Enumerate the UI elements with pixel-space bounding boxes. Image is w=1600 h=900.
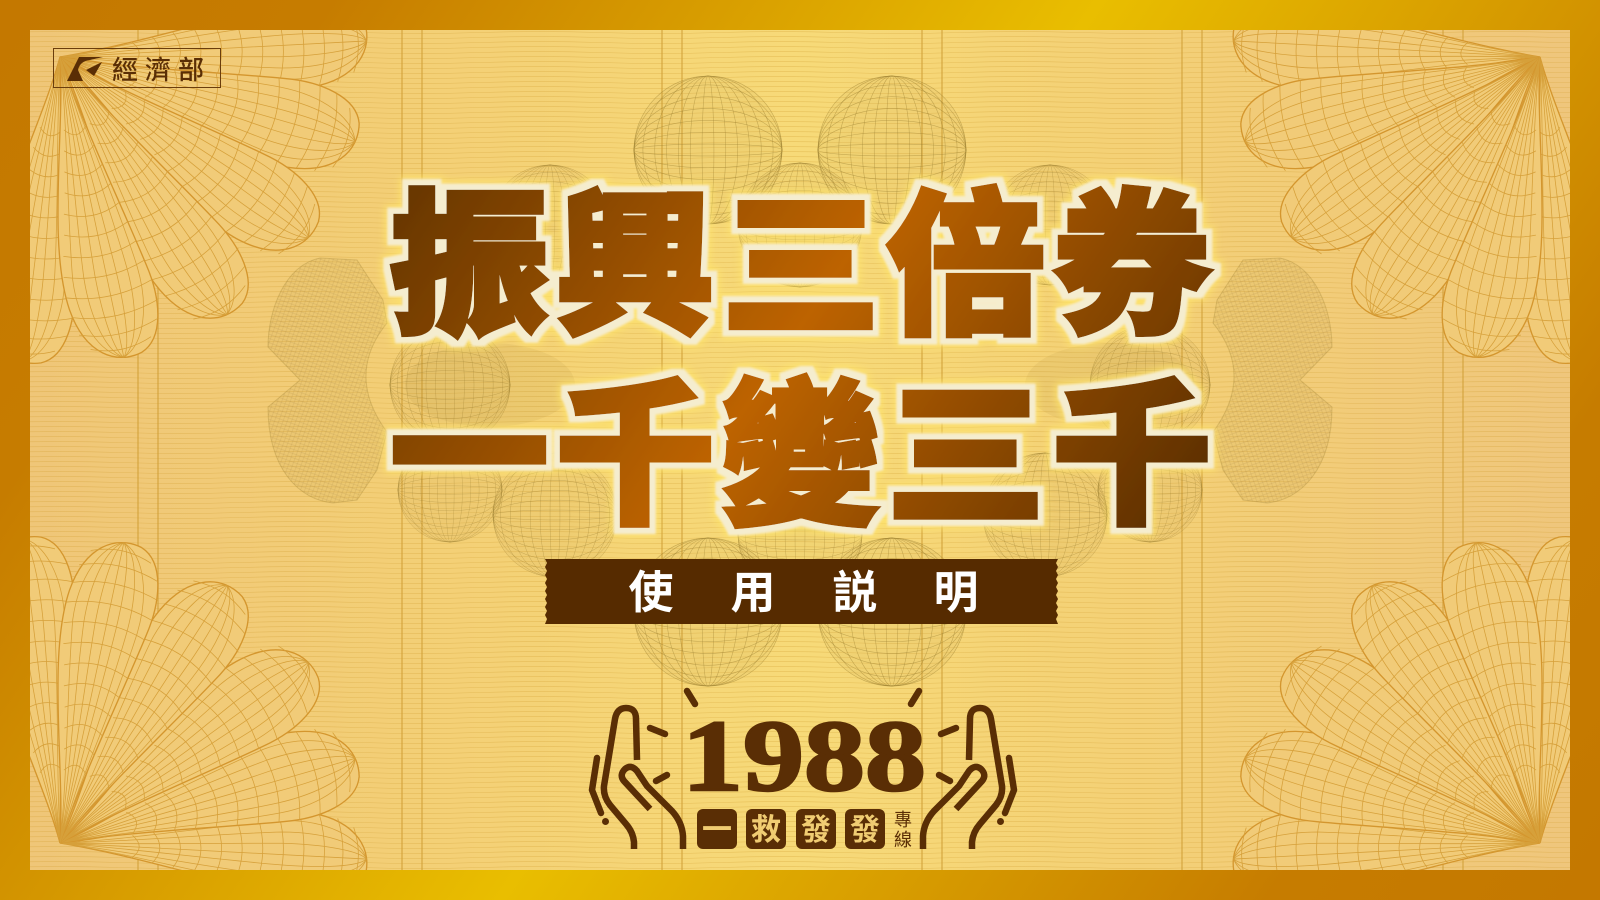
flower: top right [1232,30,1570,364]
banner text: 使用説明 [628,567,979,618]
ministry name: 經濟部 [112,55,211,85]
hotline label: 專 [894,810,912,830]
banner: instructions [545,559,1058,624]
hotline label [894,810,912,850]
hotline label: 線 [894,830,912,850]
title [390,181,1212,545]
ministry logo badge [54,48,220,88]
hotline 1988 logo [592,691,1014,850]
flower: top left [30,30,368,364]
title line 2: 一千變三千 [390,370,1212,545]
rosette: left lobes [268,258,387,503]
icon: right hand [911,691,1014,849]
vertical guide lines [138,30,1463,870]
hotline number: 1988 [682,700,926,813]
flower: bottom left [30,536,368,870]
hotline slogan: 一救發發 [702,814,880,847]
guilloche rosettes behind the title [268,76,1332,686]
hotline key tiles [697,809,885,849]
title line 1: 振興三倍券 [390,181,1212,355]
icon: left hand [592,691,695,849]
icon: ministry emblem [67,57,103,81]
rosette: right lobes [1213,258,1332,503]
flower: bottom right [1232,536,1570,870]
